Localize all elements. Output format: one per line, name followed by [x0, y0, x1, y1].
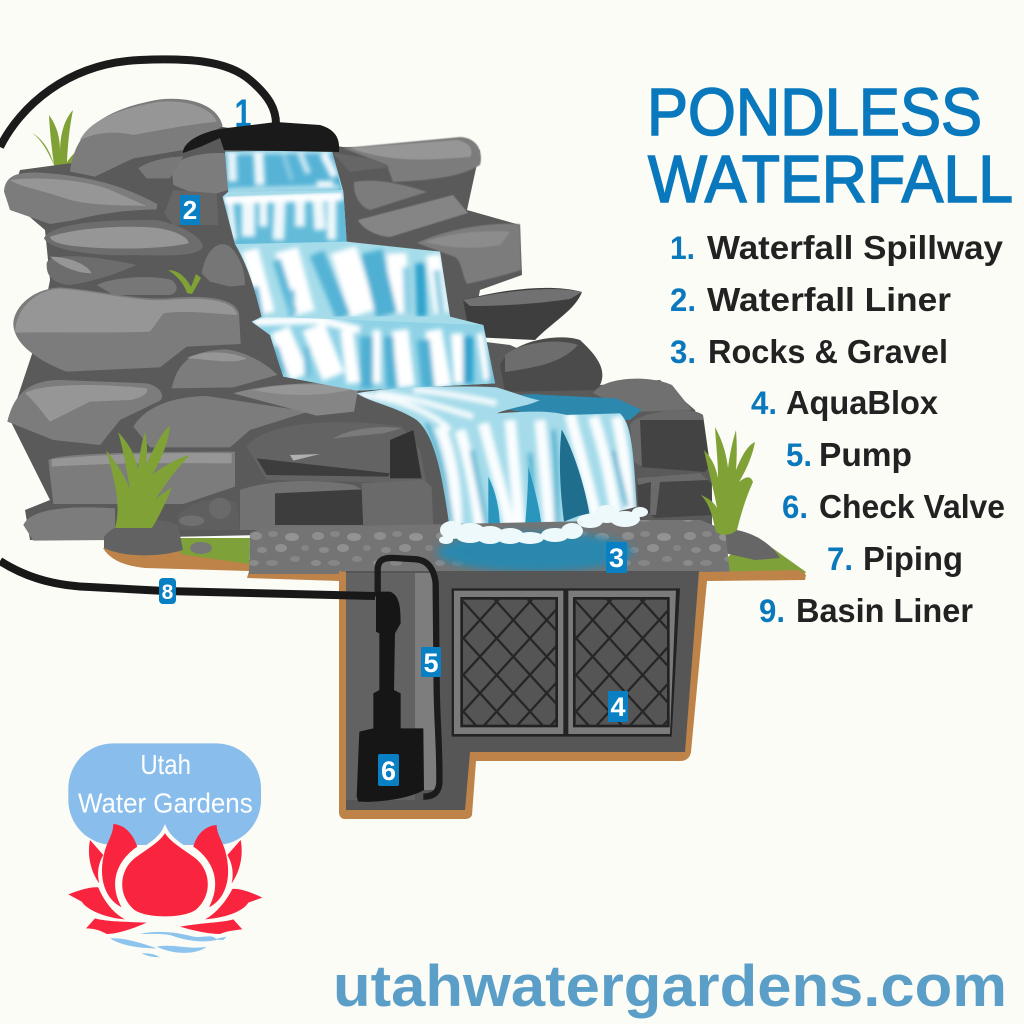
rock: slab three: [47, 256, 137, 285]
rock: top boulder: [70, 99, 223, 177]
waterfall: pool ledge and lower falls: [353, 383, 642, 533]
rock: dark ledge: [463, 288, 582, 340]
rock: small middle: [97, 277, 177, 295]
logo text: Utah: [140, 749, 191, 780]
callout 5: 5: [423, 648, 439, 678]
crate right cell: [568, 590, 676, 734]
item 4: AquaBlox: [786, 384, 939, 421]
pump shaft zone lighter: [415, 573, 437, 790]
pool at base of falls: [437, 532, 633, 572]
rocks: left stack: [4, 99, 433, 541]
left ledge brown edge: [103, 548, 345, 581]
logo: Utah Water Gardens: [68, 743, 262, 957]
left lawn: [180, 538, 250, 564]
item 6: 6.: [782, 489, 808, 525]
pump body: [357, 592, 424, 802]
rock: right wedge: [354, 181, 427, 210]
water base: [223, 150, 495, 391]
rocks: right stack: [333, 137, 521, 284]
plant: top left: [32, 110, 76, 172]
item 3: 3.: [670, 334, 696, 370]
item 2: 2.: [670, 282, 696, 318]
callout 3: 3: [609, 543, 624, 573]
deep streaks: [488, 467, 542, 527]
rock: rounded boulder: [500, 337, 602, 392]
lotus: [68, 824, 262, 934]
right stones: [717, 529, 780, 560]
rock: base blocks: [177, 480, 433, 530]
illustration: waterfall cross-section: [0, 59, 806, 819]
waterfall: upper tiers: [220, 147, 497, 393]
rock: right block: [417, 224, 521, 284]
rock: lower left: [7, 380, 162, 445]
tier 1: [225, 151, 342, 192]
item 9: Basin Liner: [796, 592, 973, 629]
rock: slab two: [44, 220, 203, 255]
AquaBlox crate: [452, 588, 680, 737]
right plant: [701, 427, 755, 535]
callout 2: 2: [183, 195, 197, 225]
basin outer liner: [339, 570, 806, 819]
callout 8: [159, 578, 176, 604]
rock: far right top: [593, 379, 692, 412]
riser pipe: [378, 558, 439, 797]
title: PONDLESS: [647, 75, 982, 150]
gap in falls: [560, 429, 589, 522]
rock: flat left: [4, 172, 157, 224]
item 1: 1.: [670, 230, 695, 266]
logo text: Water Gardens: [78, 787, 253, 818]
lawn stone: [190, 542, 212, 554]
callout 1: 1: [234, 92, 252, 136]
plant: lower left: [106, 426, 190, 528]
supply pipe over the rocks: [0, 59, 276, 147]
callout 6: [378, 754, 399, 786]
rock: ledge: [233, 383, 358, 416]
item 4: 4.: [751, 385, 777, 421]
spillway: [183, 122, 339, 153]
basin interior: [346, 571, 699, 810]
lower cascade: [353, 383, 640, 533]
tier 2: [222, 192, 347, 244]
rock: dark centre stack: [247, 422, 427, 483]
plant base rock: [104, 520, 183, 555]
rock: under spillway cluster: [138, 153, 245, 287]
item 5: Pump: [819, 436, 912, 473]
rock: far right block top: [630, 410, 710, 472]
foam at base: [439, 505, 648, 544]
item 5: 5.: [786, 437, 812, 473]
callout 3: [606, 542, 627, 573]
rock: row block: [48, 452, 235, 504]
item 9: 9.: [759, 593, 785, 629]
pump and check valve: [357, 558, 439, 802]
pool ledge: [490, 394, 642, 420]
rock: centre wedge: [172, 349, 277, 388]
plant: small sprig: [168, 270, 201, 294]
pump well shade: [346, 573, 415, 800]
rock: upper right slab: [333, 137, 481, 182]
parts list: [670, 229, 1005, 629]
rock: lower centre: [133, 396, 308, 447]
item 2: Waterfall Liner: [707, 281, 951, 318]
logo water: [110, 932, 227, 957]
logo badge: [68, 743, 261, 845]
tier 4: [250, 313, 497, 393]
right lawn: [713, 537, 806, 576]
crate left cell: [454, 590, 564, 734]
item 1: Waterfall Spillway: [707, 229, 1004, 266]
rock: bottom left: [23, 507, 115, 541]
gravel bed: [249, 520, 730, 574]
logo text: [78, 749, 253, 818]
rock: big centre: [13, 287, 241, 372]
website url: utahwatergardens.com: [333, 954, 1007, 1019]
title: [647, 75, 1013, 217]
rock backing silhouette: [10, 100, 712, 540]
drain pipe left: [0, 561, 375, 596]
item 3: Rocks & Gravel: [708, 333, 948, 370]
callout 6: 6: [381, 756, 396, 786]
item 7: Piping: [863, 540, 963, 577]
tier 3: [240, 244, 450, 316]
rock: right slab: [358, 195, 468, 237]
rock: far right block bottom: [637, 473, 713, 518]
callout 4: 4: [610, 692, 626, 722]
item 7: 7.: [827, 541, 853, 577]
item 6: Check Valve: [819, 488, 1005, 525]
callout 8: 8: [162, 581, 174, 604]
